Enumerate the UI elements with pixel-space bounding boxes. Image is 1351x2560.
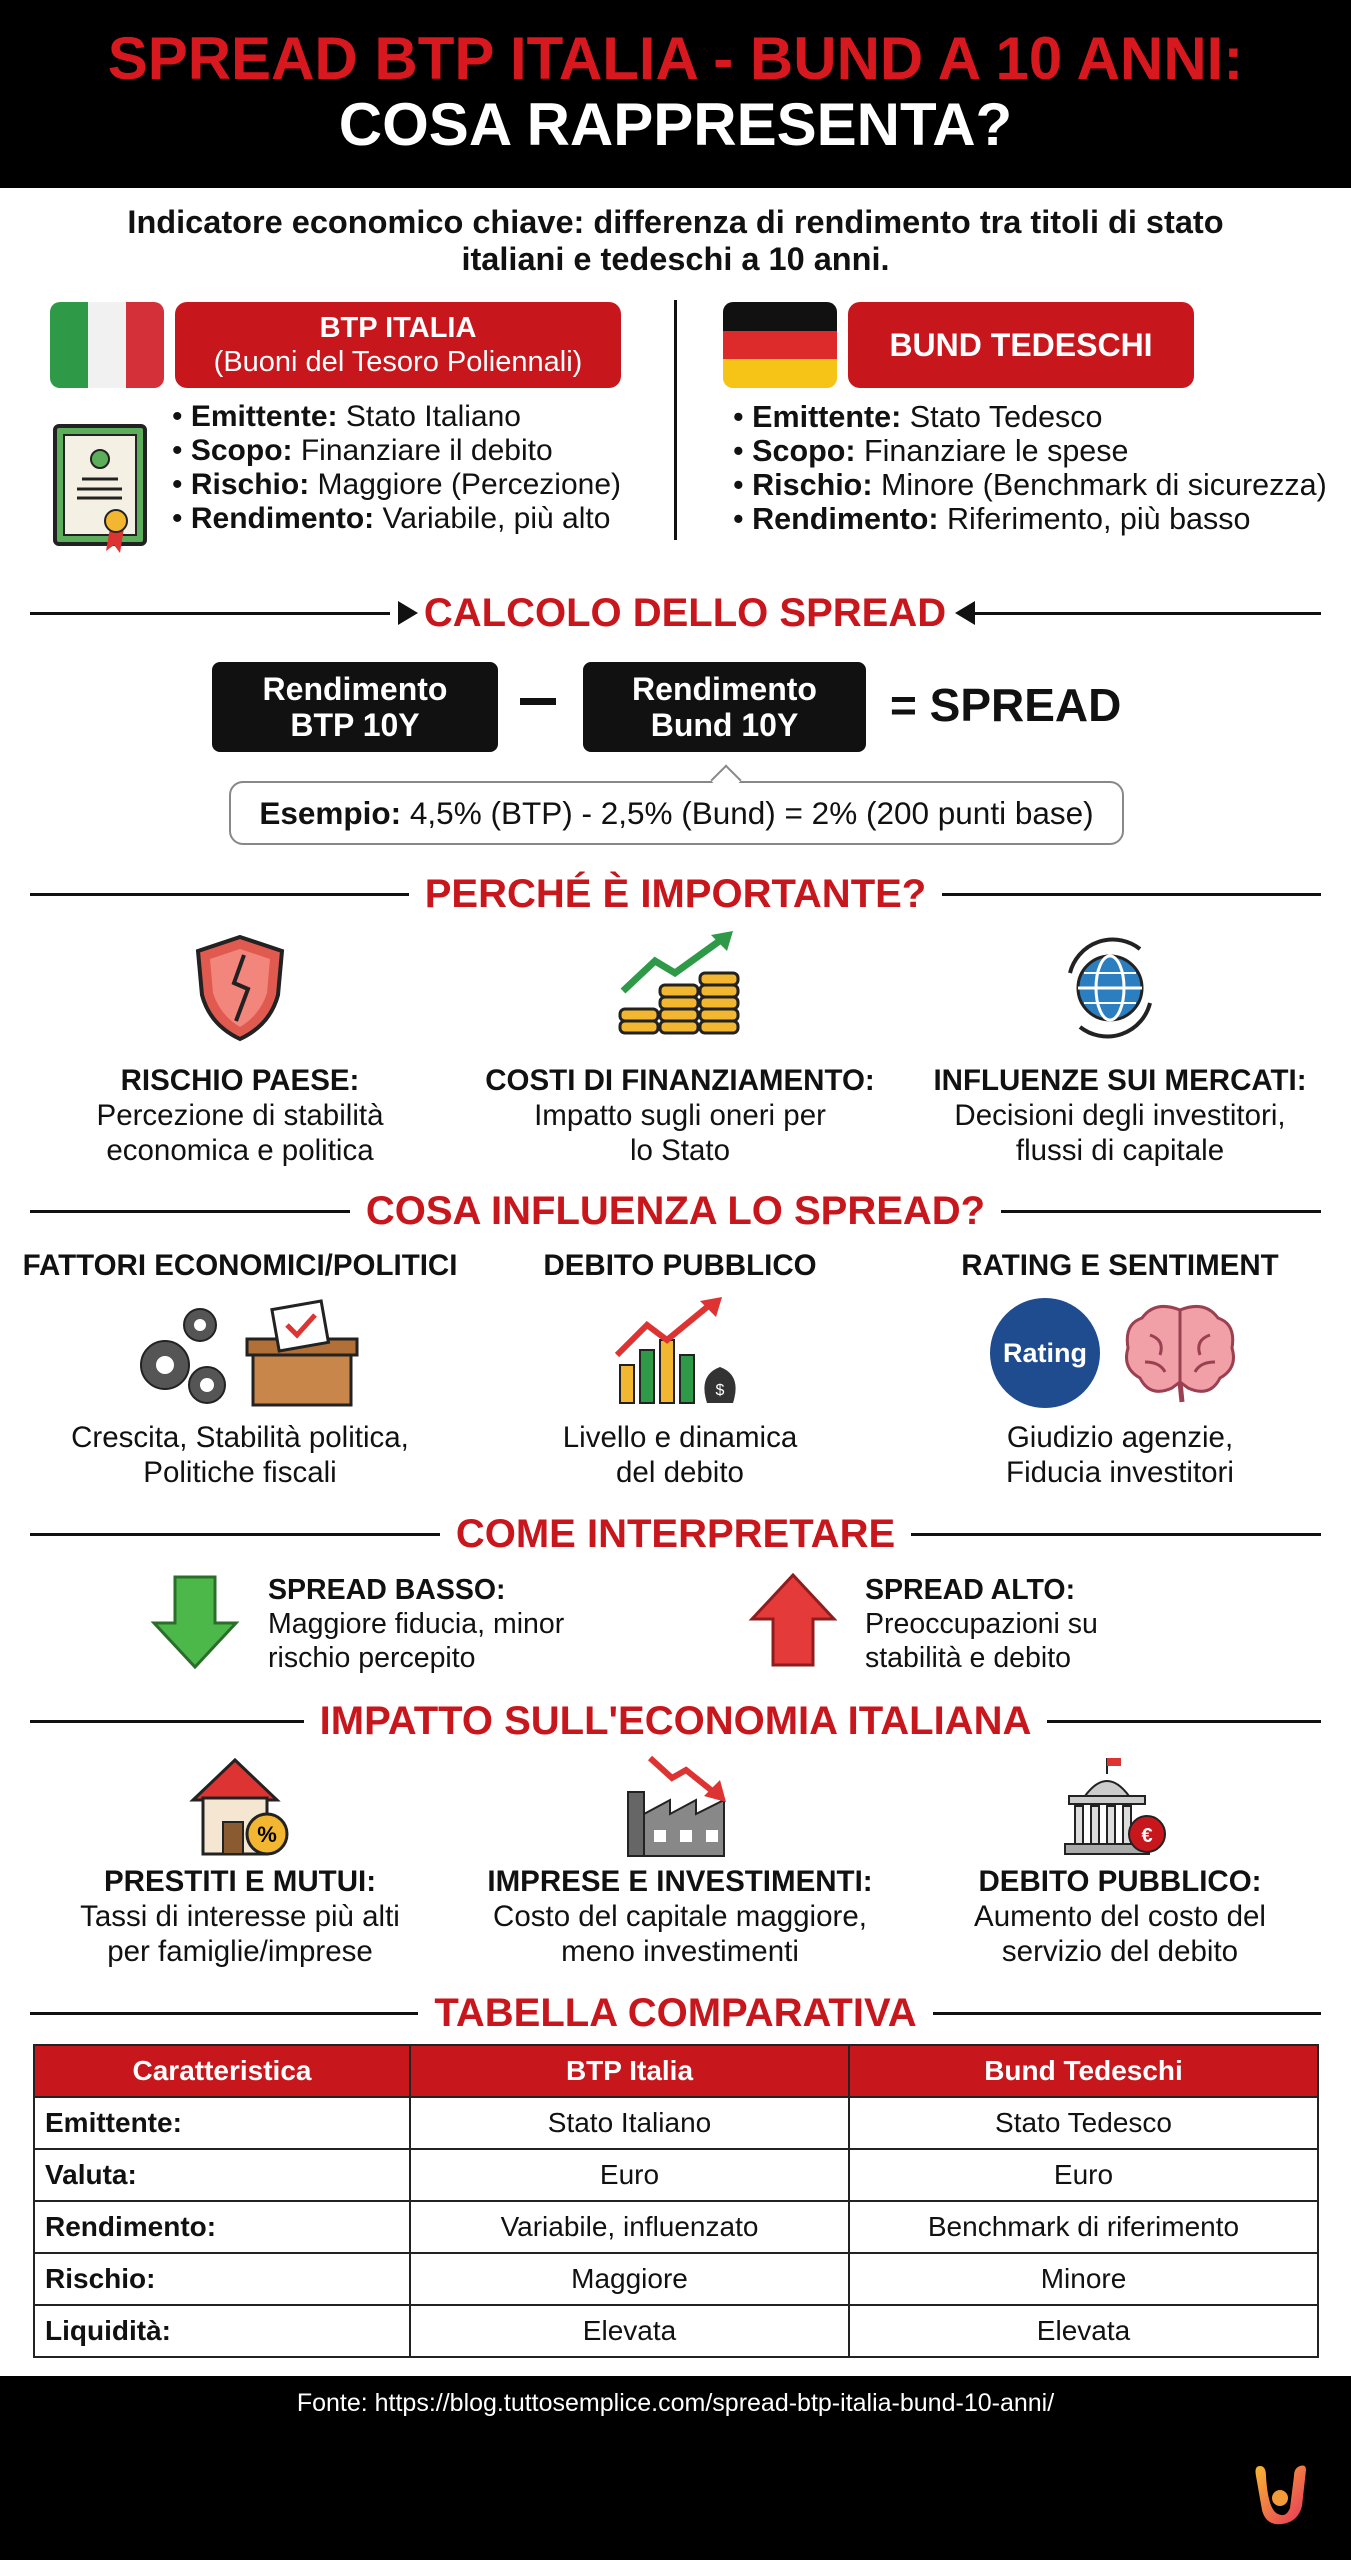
text: costi: Impatto sugli oneri per — [534, 1099, 826, 1132]
text: influenze: Decisioni degli investitori, — [954, 1099, 1286, 1132]
text: rating: Giudizio agenzie, — [1007, 1421, 1233, 1454]
section heading: tabella: TABELLA COMPARATIVA — [434, 1991, 917, 2035]
text: rischio paese: economica e politica — [106, 1134, 374, 1167]
icon: factory — [627, 1756, 726, 1857]
bullets: Bund — [733, 400, 1327, 536]
section heading: calcolo: CALCOLO DELLO SPREAD — [424, 591, 946, 635]
text: fattori: Crescita, Stabilità politica, — [71, 1421, 409, 1454]
table: Rischio: — [45, 2263, 155, 2294]
icon: arrow up red — [748, 1573, 838, 1666]
table: Caratteristica — [132, 2055, 311, 2086]
panel: impatto — [80, 1756, 1266, 1968]
text: spread basso — [268, 1574, 564, 1674]
text: fattori — [71, 1421, 409, 1489]
bullets: BTP: • Emittente: Stato Italiano — [172, 400, 521, 433]
source text: Fonte: https://blog.tuttosemplice.com/spread-btp-italia-bund-10-anni/ — [297, 2389, 1054, 2417]
title: SPREAD BTP ITALIA - BUND A 10 ANNI: — [108, 25, 1243, 92]
table: Variabile, influenzato — [501, 2211, 758, 2242]
text: prestiti: per famiglie/imprese — [107, 1935, 373, 1968]
table: Benchmark di riferimento — [928, 2211, 1239, 2242]
bullets: BTP: • Rendimento: Variabile, più alto — [172, 502, 610, 535]
bullets: Bund: • Scopo: Finanziare le spese — [733, 434, 1128, 468]
text: influenze — [933, 1064, 1307, 1167]
box: rendimento Bund: Bund 10Y — [651, 707, 798, 743]
section heading: perché: PERCHÉ È IMPORTANTE? — [425, 872, 926, 916]
table: Stato Italiano — [548, 2107, 711, 2138]
title — [108, 25, 1243, 158]
bullets: BTP: • Rischio: Maggiore (Percezione) — [172, 468, 621, 501]
footer — [0, 2376, 1351, 2560]
icon: debt chart: $ — [716, 1382, 725, 1399]
panel: fattori — [23, 1249, 1279, 1489]
table: Valuta: — [45, 2159, 137, 2190]
section heading: tabella — [30, 1991, 1321, 2035]
text: prestiti: PRESTITI E MUTUI: — [104, 1865, 376, 1898]
text: rating: Fiducia investitori — [1006, 1456, 1234, 1489]
panel: BTP Italia — [50, 302, 621, 553]
text: influenze: flussi di capitale — [1016, 1134, 1224, 1167]
badge: BTP Italia: BTP ITALIA — [320, 312, 476, 344]
panel: perché — [97, 931, 1307, 1167]
subtitle: Indicatore economico chiave: differenza di rendimento tra titoli di stato — [127, 204, 1224, 240]
badge: BTP Italia — [175, 302, 621, 388]
box: rendimento Bund — [583, 662, 866, 752]
bullets: BTP — [172, 400, 621, 535]
panel: interpretare — [150, 1573, 1098, 1674]
text: debito: Livello e dinamica — [563, 1421, 797, 1454]
bullets: BTP: • Scopo: Finanziare il debito — [172, 434, 553, 467]
text: debito pubblico — [900, 1864, 1340, 1969]
icon: coins — [618, 931, 740, 1034]
icon: debt chart — [614, 1297, 736, 1404]
text: imprese — [487, 1865, 873, 1968]
table: Elevata — [583, 2315, 676, 2346]
text: debito pubblico: servizio del debito — [1002, 1935, 1238, 1968]
text: debito pubblico: Aumento del costo del — [974, 1900, 1266, 1933]
icon: brain — [1125, 1304, 1235, 1402]
icon: government building: € — [1141, 1825, 1153, 1847]
text: spread basso: rischio percepito — [268, 1642, 476, 1674]
text: imprese: Costo del capitale maggiore, — [493, 1900, 867, 1933]
box: rendimento BTP: BTP 10Y — [290, 707, 420, 743]
badge: Bund: BUND TEDESCHI — [889, 327, 1153, 363]
icon: house — [189, 1758, 288, 1856]
table: Euro — [1054, 2159, 1113, 2190]
table — [33, 2044, 1319, 2358]
icon: house: % — [257, 1822, 277, 1847]
header — [0, 0, 1351, 188]
section heading: calcolo — [30, 591, 1321, 635]
text: imprese: IMPRESE E INVESTIMENTI: — [487, 1865, 873, 1898]
text: spread alto: Preoccupazioni su — [865, 1608, 1098, 1640]
text: rating — [1006, 1421, 1234, 1489]
text: fattori: Politiche fiscali — [143, 1456, 337, 1489]
table: Bund Tedeschi — [984, 2055, 1183, 2086]
text: spread basso: SPREAD BASSO: — [268, 1574, 506, 1606]
result: spread: = SPREAD — [890, 679, 1121, 731]
section heading: impatto — [30, 1699, 1321, 1743]
table: Maggiore — [571, 2263, 688, 2294]
section heading: perché — [30, 872, 1321, 916]
heading: fattori: FATTORI ECONOMICI/POLITICI — [23, 1249, 457, 1282]
box: rendimento Bund: Rendimento — [632, 671, 817, 707]
text: costi: lo Stato — [630, 1134, 730, 1167]
table: Minore — [1041, 2263, 1126, 2294]
icon: shield — [196, 934, 284, 1042]
text: spread alto: stabilità e debito — [865, 1642, 1071, 1674]
heading: rating: RATING E SENTIMENT — [961, 1249, 1279, 1282]
text: costi — [485, 1064, 875, 1167]
badge: BTP Italia: (Buoni del Tesoro Poliennali) — [214, 346, 582, 378]
bullets: Bund: • Rischio: Minore (Benchmark di sicurezza) — [733, 468, 1327, 502]
text: imprese: meno investimenti — [561, 1935, 799, 1968]
icon: globe — [1068, 938, 1152, 1038]
text: debito: del debito — [616, 1456, 744, 1489]
icon: rating badge: Rating — [1003, 1338, 1087, 1368]
text: prestiti: Tassi di interesse più alti — [80, 1900, 400, 1933]
text: debito — [563, 1421, 798, 1489]
section heading: cosa influenza: COSA INFLUENZA LO SPREAD? — [366, 1189, 985, 1233]
box: rendimento BTP: Rendimento — [263, 671, 447, 707]
subtitle — [127, 204, 1224, 277]
section heading: cosa influenza — [30, 1189, 1321, 1233]
text: prestiti — [80, 1865, 400, 1968]
example callout: Esempio: 4,5% (BTP) - 2,5% (Bund) = 2% (200 punti base) — [259, 795, 1094, 831]
heading: debito: DEBITO PUBBLICO — [543, 1249, 817, 1282]
text: debito pubblico: DEBITO PUBBLICO: — [978, 1865, 1262, 1898]
text: rischio paese: RISCHIO PAESE: — [121, 1064, 359, 1097]
icon: italy flag — [50, 302, 164, 388]
icon: logo — [1250, 2462, 1310, 2528]
icon: arrow down green — [150, 1576, 240, 1670]
table: Elevata — [1037, 2315, 1130, 2346]
text: spread alto: SPREAD ALTO: — [865, 1574, 1075, 1606]
bullets: Bund: • Rendimento: Riferimento, più basso — [733, 502, 1250, 536]
icon: germany flag — [723, 302, 837, 388]
table: Emittente: — [45, 2107, 182, 2138]
subtitle: italiani e tedeschi a 10 anni. — [461, 241, 890, 277]
title: COSA RAPPRESENTA? — [339, 91, 1012, 158]
icon: certificate — [53, 424, 147, 553]
icon: rating badge — [990, 1298, 1100, 1408]
section heading: impatto: IMPATTO SULL'ECONOMIA ITALIANA — [320, 1699, 1031, 1743]
badge: Bund — [848, 302, 1194, 388]
icon: government building — [1064, 1758, 1166, 1855]
text: rischio paese: Percezione di stabilità — [97, 1099, 383, 1132]
example callout — [229, 781, 1124, 845]
box: rendimento BTP — [212, 662, 498, 752]
bullets: Bund: • Emittente: Stato Tedesco — [733, 400, 1102, 434]
table: BTP Italia — [566, 2055, 693, 2086]
section heading: come interpretare — [30, 1512, 1321, 1556]
table: Liquidità: — [45, 2315, 171, 2346]
text: spread basso: Maggiore fiducia, minor — [268, 1608, 564, 1640]
section heading: come interpretare: COME INTERPRETARE — [456, 1512, 895, 1556]
panel: Bund — [723, 302, 1327, 536]
text: spread alto — [865, 1574, 1098, 1674]
icon: gears and ballot — [140, 1299, 358, 1406]
text: costi: COSTI DI FINANZIAMENTO: — [485, 1064, 875, 1097]
table: Stato Tedesco — [995, 2107, 1172, 2138]
table: Euro — [600, 2159, 659, 2190]
text: rischio paese — [97, 1064, 384, 1167]
table: Rendimento: — [45, 2211, 216, 2242]
formula — [212, 662, 1121, 752]
text: influenze: INFLUENZE SUI MERCATI: — [933, 1064, 1307, 1097]
